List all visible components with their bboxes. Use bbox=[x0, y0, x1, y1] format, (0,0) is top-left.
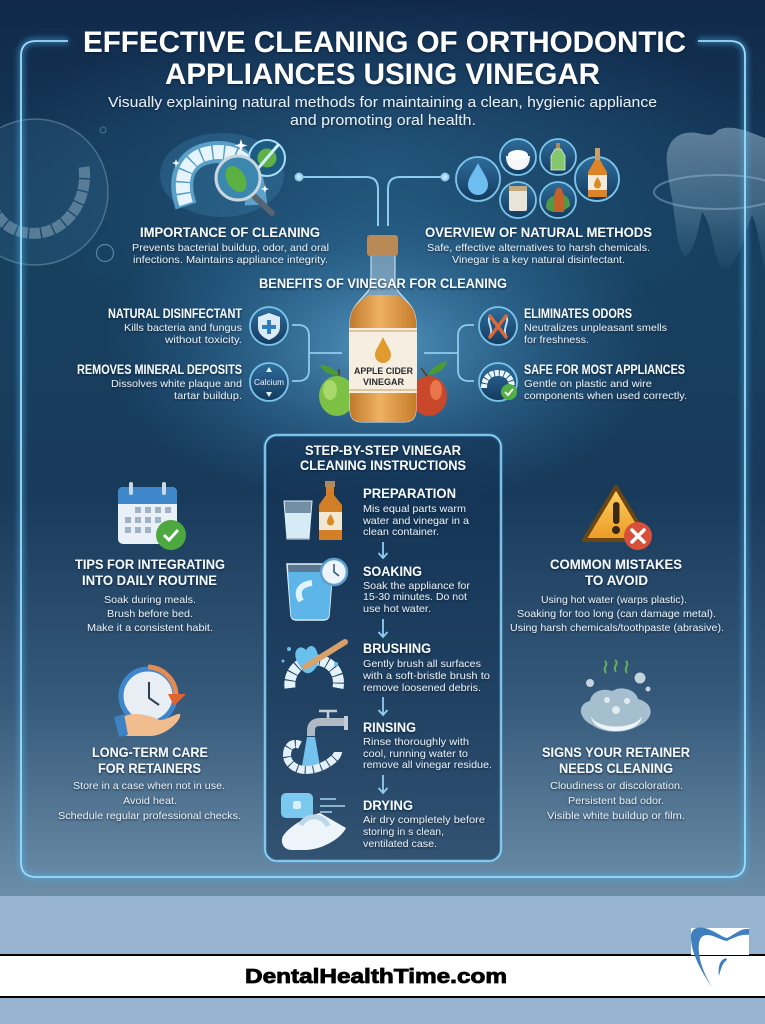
step: soaking: 15-30 minutes. Do not bbox=[363, 591, 467, 603]
block: tips for daily routine: Soak during meals. bbox=[104, 594, 196, 606]
heading: overview of natural methods: OVERVIEW OF NATURAL METHODS bbox=[425, 225, 652, 240]
block: signs retainer needs cleaning: Persistent bad odor. bbox=[568, 795, 664, 807]
panel heading: CLEANING INSTRUCTIONS bbox=[300, 458, 466, 473]
block: long-term care: FOR RETAINERS bbox=[98, 761, 201, 776]
block: long-term care bbox=[58, 745, 241, 822]
icon: herbal oil bbox=[540, 182, 576, 218]
step: rinsing bbox=[363, 720, 492, 771]
block: signs retainer needs cleaning: Cloudiness or discoloration. bbox=[550, 780, 683, 792]
heading: importance of cleaning: Prevents bacterial buildup, odor, and oral bbox=[132, 242, 329, 254]
panel heading bbox=[300, 443, 466, 473]
arrow bbox=[378, 542, 388, 558]
block: signs retainer needs cleaning: SIGNS YOUR RETAINER bbox=[542, 745, 690, 760]
bottle label text: VINEGAR bbox=[363, 377, 404, 388]
subtitle: and promoting oral health. bbox=[290, 112, 476, 129]
step: brushing: Gently brush all surfaces bbox=[363, 658, 481, 670]
illustration: vinegar bottle bbox=[349, 235, 417, 422]
block: long-term care: LONG-TERM CARE bbox=[92, 745, 208, 760]
benefit: natural disinfectant: without toxicity. bbox=[164, 334, 242, 346]
step: brushing: BRUSHING bbox=[363, 641, 431, 656]
benefit: safe for most appliances: Gentle on plastic and wire bbox=[524, 378, 652, 390]
step: rinsing: Rinse thoroughly with bbox=[363, 736, 469, 748]
icon: brush and retainer bbox=[282, 642, 345, 688]
step: drying: storing in s clean, bbox=[363, 826, 444, 838]
block: common mistakes: COMMON MISTAKES bbox=[550, 557, 682, 572]
icon: warning triangle bbox=[584, 487, 652, 550]
panel: step-by-step instructions bbox=[265, 435, 501, 861]
icon: vinegar bottle bbox=[575, 148, 619, 201]
step: preparation: water and vinegar in a bbox=[362, 515, 469, 527]
step: drying: Air dry completely before bbox=[363, 814, 485, 826]
icon: faucet bbox=[287, 711, 348, 770]
bottle label text bbox=[354, 366, 413, 388]
icon: dirty retainer cloud bbox=[581, 660, 651, 732]
block: tips for daily routine: Brush before bed. bbox=[107, 608, 193, 620]
benefit: safe for most appliances: SAFE FOR MOST APPLIANCES bbox=[524, 362, 685, 377]
icon: clock in hand bbox=[114, 667, 186, 737]
benefit: eliminates odors bbox=[524, 306, 667, 346]
icon: safe retainer bbox=[479, 363, 517, 401]
step: rinsing: RINSING bbox=[363, 720, 416, 735]
icon: retainer with magnifier and germ bbox=[160, 133, 285, 217]
benefit connectors bbox=[292, 325, 474, 381]
icon: case and towel bbox=[281, 793, 346, 850]
block: long-term care: Avoid heat. bbox=[123, 795, 177, 807]
footer background bbox=[0, 896, 765, 1024]
subtitle bbox=[108, 94, 657, 129]
step: preparation: Mis equal parts warm bbox=[363, 503, 466, 515]
decorative tooth bbox=[654, 128, 765, 270]
step: drying: ventilated case. bbox=[363, 838, 437, 850]
icon: baking soda bbox=[500, 182, 536, 218]
icon: no odor bbox=[479, 307, 517, 345]
step: soaking: SOAKING bbox=[363, 564, 422, 579]
heading: benefits of vinegar: BENEFITS OF VINEGAR FOR CLEANING bbox=[259, 276, 507, 291]
icon: water drop bbox=[456, 157, 500, 201]
bottle label text: APPLE CIDER bbox=[354, 366, 413, 377]
benefit: removes mineral deposits: Dissolves white plaque and bbox=[111, 378, 242, 390]
icon: calendar with check bbox=[118, 482, 186, 550]
block: common mistakes: Using harsh chemicals/toothpaste (abrasive). bbox=[510, 622, 724, 634]
block: common mistakes: Using hot water (warps plastic). bbox=[541, 594, 687, 606]
block: tips for daily routine: Make it a consistent habit. bbox=[87, 622, 213, 634]
heading: overview of natural methods bbox=[425, 225, 652, 266]
title: APPLIANCES USING VINEGAR bbox=[165, 58, 600, 91]
step: preparation: PREPARATION bbox=[363, 486, 456, 501]
step: rinsing: remove all vinegar residue. bbox=[363, 759, 492, 771]
logo: tooth bbox=[691, 927, 749, 987]
block: long-term care: Schedule regular professional checks. bbox=[58, 810, 241, 822]
step: brushing: with a soft-bristle brush to bbox=[362, 670, 490, 682]
footer band: DentalHealthTime.com bbox=[245, 966, 507, 988]
heading: overview of natural methods: Safe, effective alternatives to harsh chemicals. bbox=[427, 242, 650, 254]
benefit: eliminates odors: ELIMINATES ODORS bbox=[524, 306, 632, 321]
arrow bbox=[378, 775, 388, 793]
step: soaking bbox=[363, 564, 471, 615]
icon: soaking glass with clock bbox=[287, 559, 347, 620]
outer frame bbox=[21, 41, 745, 877]
block: common mistakes bbox=[510, 557, 724, 634]
block: common mistakes: Soaking for too long (can damage metal). bbox=[517, 608, 716, 620]
block: tips for daily routine bbox=[75, 557, 225, 634]
icon: shield bbox=[250, 307, 288, 345]
benefit: safe for most appliances bbox=[524, 362, 687, 402]
step: preparation bbox=[362, 486, 469, 538]
footer band bbox=[0, 954, 765, 998]
icon: calcium: Calcium bbox=[254, 377, 284, 387]
icon: glass and bottle bbox=[284, 481, 342, 540]
benefit: natural disinfectant bbox=[108, 306, 243, 346]
step: brushing: remove loosened debris. bbox=[363, 682, 481, 694]
step: soaking: Soak the appliance for bbox=[363, 580, 471, 592]
benefit: natural disinfectant: Kills bacteria and fungus bbox=[124, 322, 242, 334]
block: signs retainer needs cleaning: Visible white buildup or film. bbox=[547, 810, 685, 822]
step: preparation: clean container. bbox=[363, 526, 439, 538]
arrow bbox=[378, 619, 388, 637]
step: rinsing: cool, running water to bbox=[363, 748, 468, 760]
icon: green bottle bbox=[540, 139, 576, 175]
title bbox=[83, 26, 686, 91]
benefit: removes mineral deposits bbox=[77, 362, 242, 402]
arrow bbox=[378, 697, 388, 715]
benefit: eliminates odors: Neutralizes unpleasant smells bbox=[524, 322, 667, 334]
panel heading: STEP-BY-STEP VINEGAR bbox=[305, 443, 461, 458]
block: signs retainer needs cleaning bbox=[542, 745, 690, 822]
benefit: removes mineral deposits: tartar buildup. bbox=[174, 390, 242, 402]
icon: calcium bbox=[250, 363, 288, 401]
illustration: apples bbox=[319, 361, 447, 416]
step: drying bbox=[363, 798, 485, 850]
block: tips for daily routine: TIPS FOR INTEGRATING bbox=[75, 557, 225, 572]
decorative retainer bubble bbox=[0, 119, 114, 265]
heading: importance of cleaning: IMPORTANCE OF CLEANING bbox=[140, 225, 320, 240]
step: soaking: use hot water. bbox=[363, 603, 431, 615]
title: EFFECTIVE CLEANING OF ORTHODONTIC bbox=[83, 26, 686, 59]
icon: powder bowl bbox=[500, 139, 536, 175]
block: long-term care: Store in a case when not in use. bbox=[73, 780, 225, 792]
heading: overview of natural methods: Vinegar is a key natural disinfectant. bbox=[452, 254, 625, 266]
icon group: natural methods bbox=[456, 139, 619, 218]
subtitle: Visually explaining natural methods for maintaining a clean, hygienic appliance bbox=[108, 94, 657, 111]
block: tips for daily routine: INTO DAILY ROUTINE bbox=[82, 573, 217, 588]
block: common mistakes: TO AVOID bbox=[585, 573, 648, 588]
heading: importance of cleaning bbox=[132, 225, 329, 266]
connector lines to bottle bbox=[296, 174, 448, 226]
benefit: eliminates odors: for freshness. bbox=[524, 334, 589, 346]
step: drying: DRYING bbox=[363, 798, 413, 813]
block: signs retainer needs cleaning: NEEDS CLEANING bbox=[559, 761, 673, 776]
benefit: natural disinfectant: NATURAL DISINFECTANT bbox=[108, 306, 243, 321]
step: brushing bbox=[362, 641, 490, 694]
benefit: safe for most appliances: components when used correctly. bbox=[524, 390, 687, 402]
benefit: removes mineral deposits: REMOVES MINERAL DEPOSITS bbox=[77, 362, 242, 377]
heading: importance of cleaning: infections. Maintains appliance integrity. bbox=[133, 254, 328, 266]
